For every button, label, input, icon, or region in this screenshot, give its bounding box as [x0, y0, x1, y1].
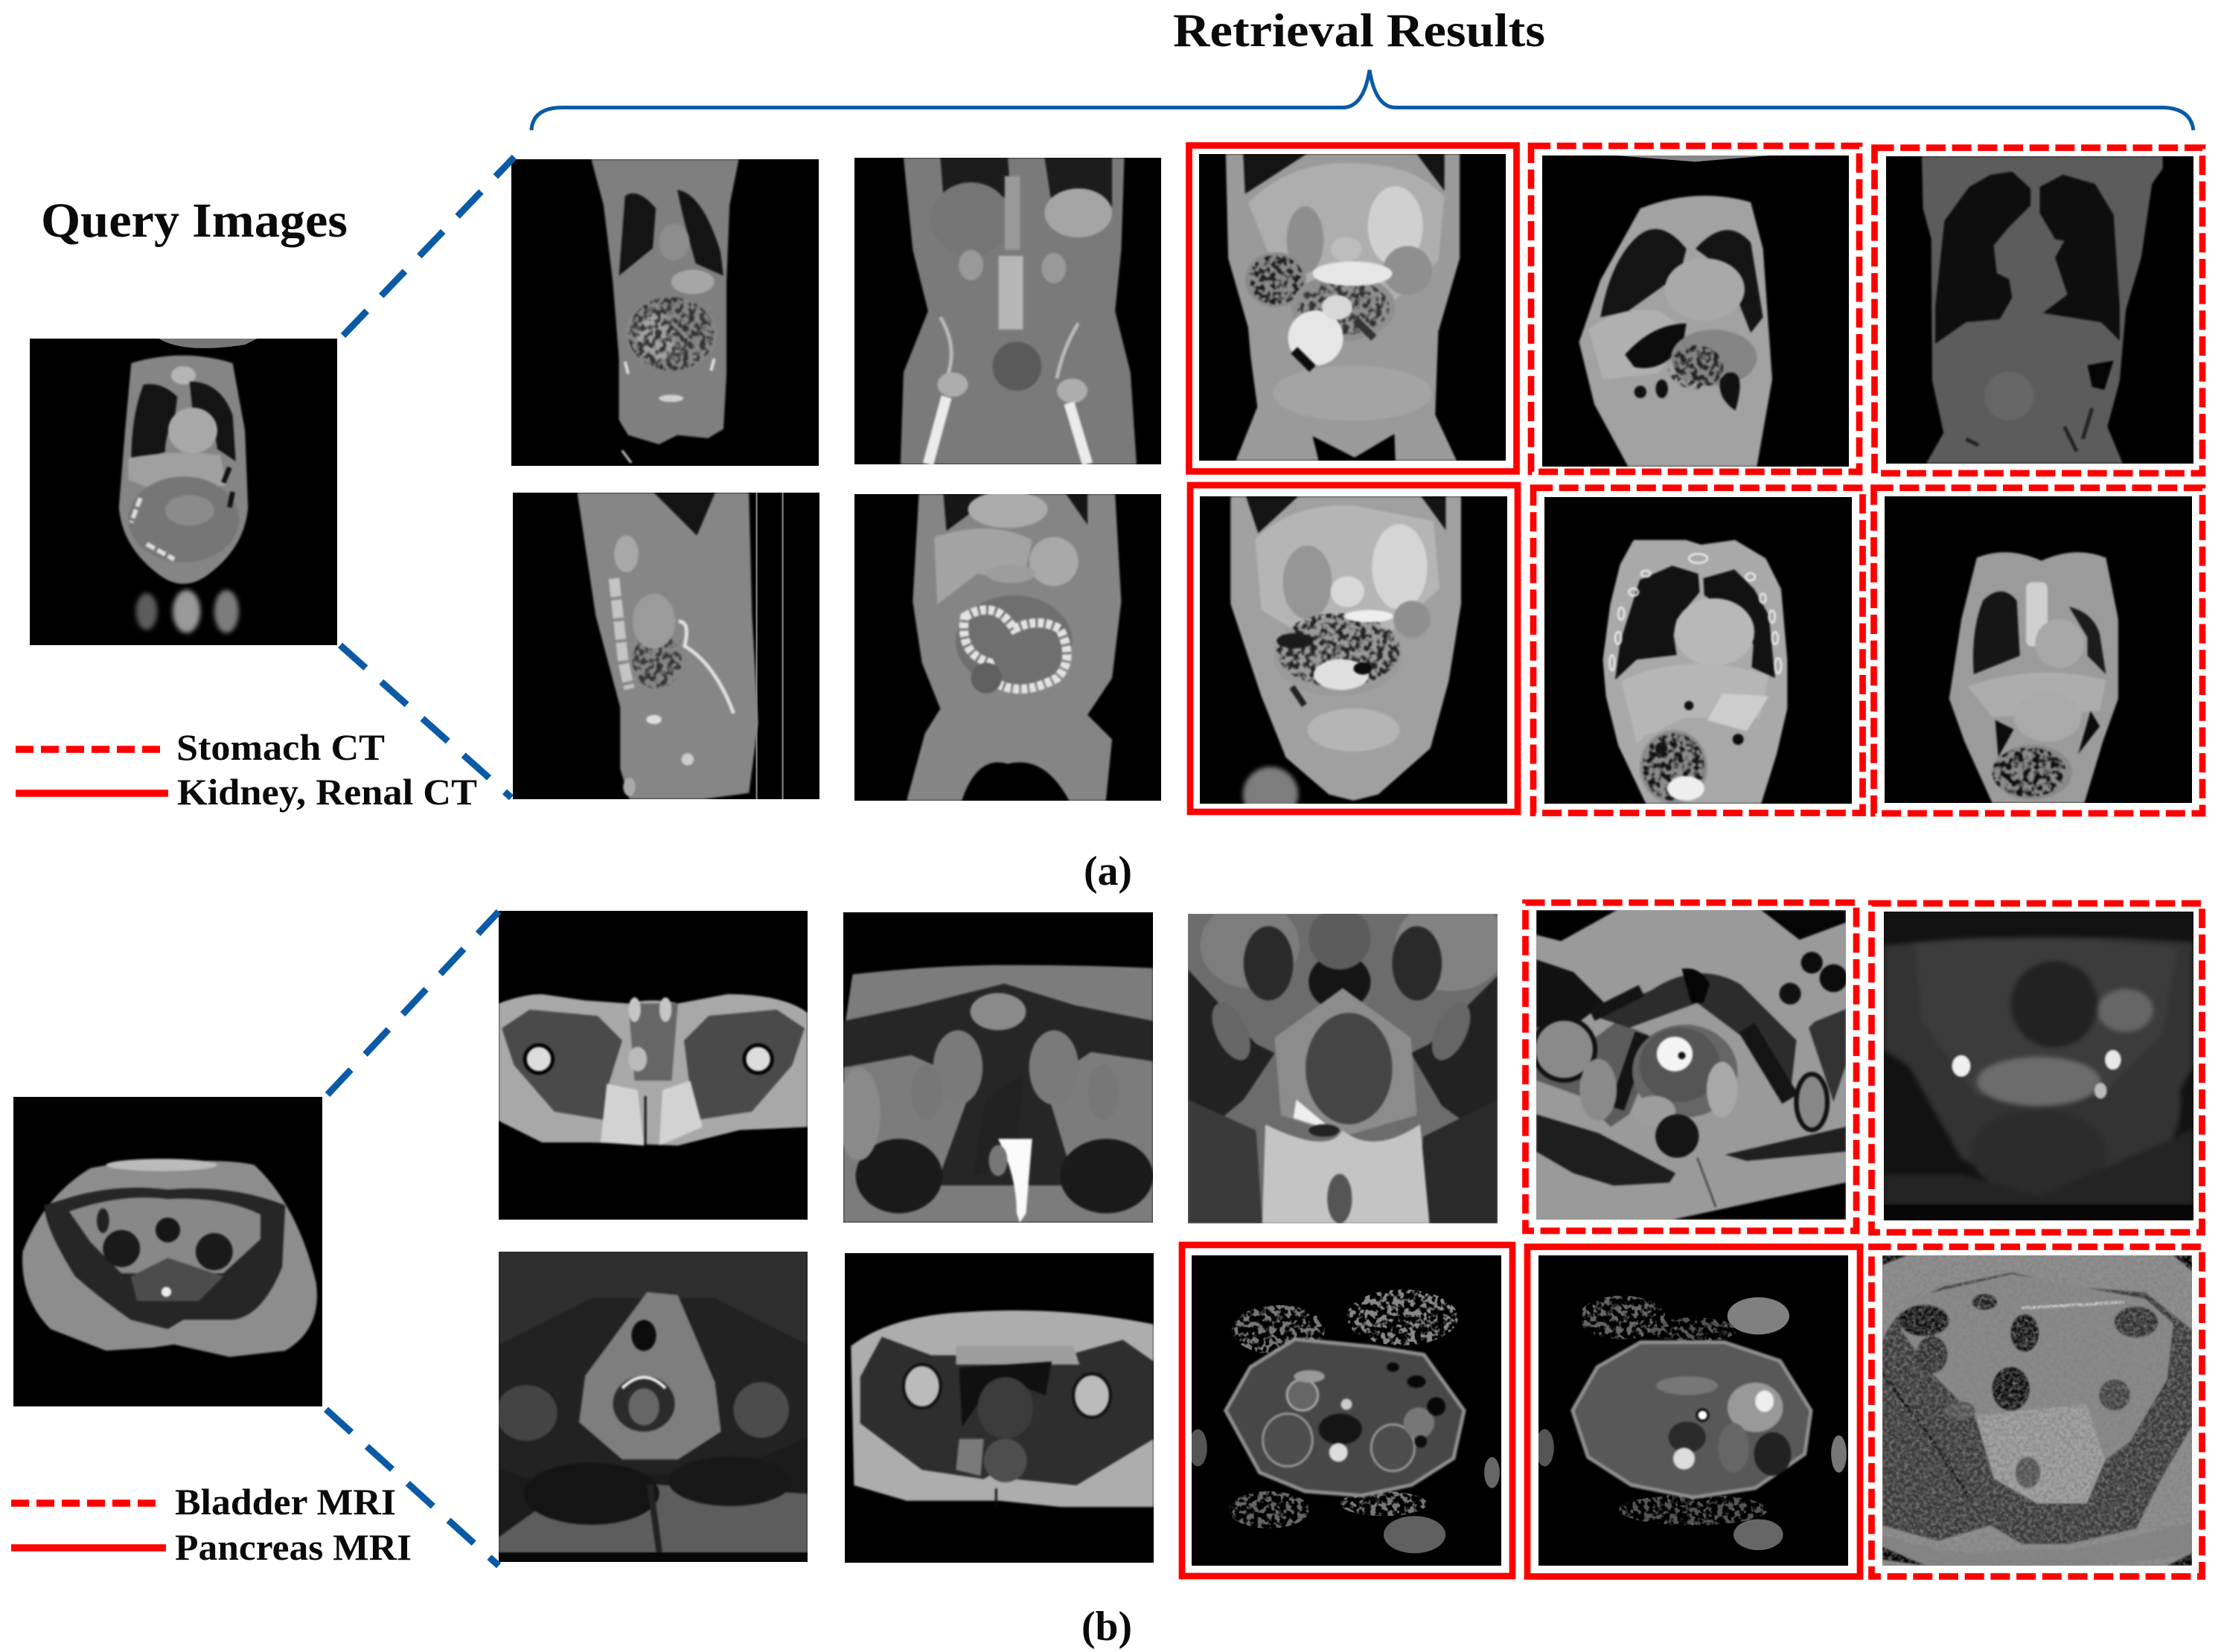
MRI retrieved row 2 column 1 [499, 1252, 808, 1562]
retrieved CT row 2 column 3 [1200, 496, 1507, 804]
title: Retrieval Results: Retrieval Results [1173, 4, 1545, 57]
retrieved CT row 2 column 1 [513, 493, 819, 799]
query CT image [30, 339, 337, 645]
retrieved CT row 2 column 4 [1544, 497, 1852, 804]
part label (a): (a) [1084, 848, 1132, 894]
MRI frame: Pancreas row 2 column 4 [1527, 1247, 1860, 1576]
CT frame: Kidney row 1 column 3 [1189, 146, 1517, 472]
zoom lines from query CT to results [340, 157, 514, 798]
query MRI image [13, 1097, 322, 1406]
MRI frame: Bladder row 2 column 5 [1871, 1247, 2202, 1576]
legend: CT categories: Kidney, Renal CT [177, 771, 477, 813]
heading: Query Images: Query Images [41, 193, 348, 248]
CT frame: Stomach row 1 column 4 [1531, 146, 1859, 472]
retrieved MRI row 1 column 2 [843, 912, 1153, 1223]
retrieved CT row 1 column 1 [511, 159, 819, 466]
MRI frame: Bladder row 1 column 4 [1526, 903, 1856, 1231]
retrieved CT row 2 column 5 [1885, 496, 2192, 803]
zoom lines from query MRI to results [326, 912, 499, 1566]
MRI frame: Pancreas row 2 column 3 [1182, 1245, 1512, 1576]
CT frame: Stomach row 1 column 5 [1874, 147, 2202, 473]
MRI retrieved row 2 column 3 [1192, 1255, 1501, 1566]
MRI retrieved row 2 column 5 [1882, 1255, 2192, 1566]
retrieved CT row 1 column 2 [854, 158, 1161, 464]
legend: CT categories: Stomach CT [176, 726, 385, 768]
retrieved CT row 1 column 4 [1542, 156, 1849, 467]
retrieved MRI row 1 column 4 [1536, 910, 1846, 1220]
CT frame: Stomach row 2 column 5 [1874, 488, 2202, 813]
retrieved CT row 1 column 5 [1886, 156, 2193, 464]
MRI frame: Bladder row 1 column 5 [1871, 903, 2202, 1232]
MRI retrieved row 2 column 2 [845, 1253, 1154, 1563]
brace over retrieval results [531, 70, 2193, 130]
retrieved CT row 2 column 2 [854, 494, 1161, 801]
legend: MRI categories: Bladder MRI [175, 1481, 396, 1523]
retrieved MRI row 1 column 5 [1884, 912, 2193, 1220]
legend: MRI categories: Pancreas MRI [175, 1526, 412, 1568]
CT frame: Kidney row 2 column 3 [1190, 485, 1518, 812]
retrieved CT row 1 column 3 [1199, 154, 1506, 461]
CT frame: Stomach row 2 column 4 [1533, 488, 1862, 813]
part label (b): (b) [1081, 1604, 1132, 1650]
MRI retrieved row 2 column 4 [1538, 1255, 1848, 1566]
legend: CT categories [16, 726, 477, 813]
retrieved MRI row 1 column 3 [1188, 914, 1498, 1223]
legend: MRI categories [11, 1481, 412, 1568]
retrieved MRI row 1 column 1 [499, 911, 808, 1220]
